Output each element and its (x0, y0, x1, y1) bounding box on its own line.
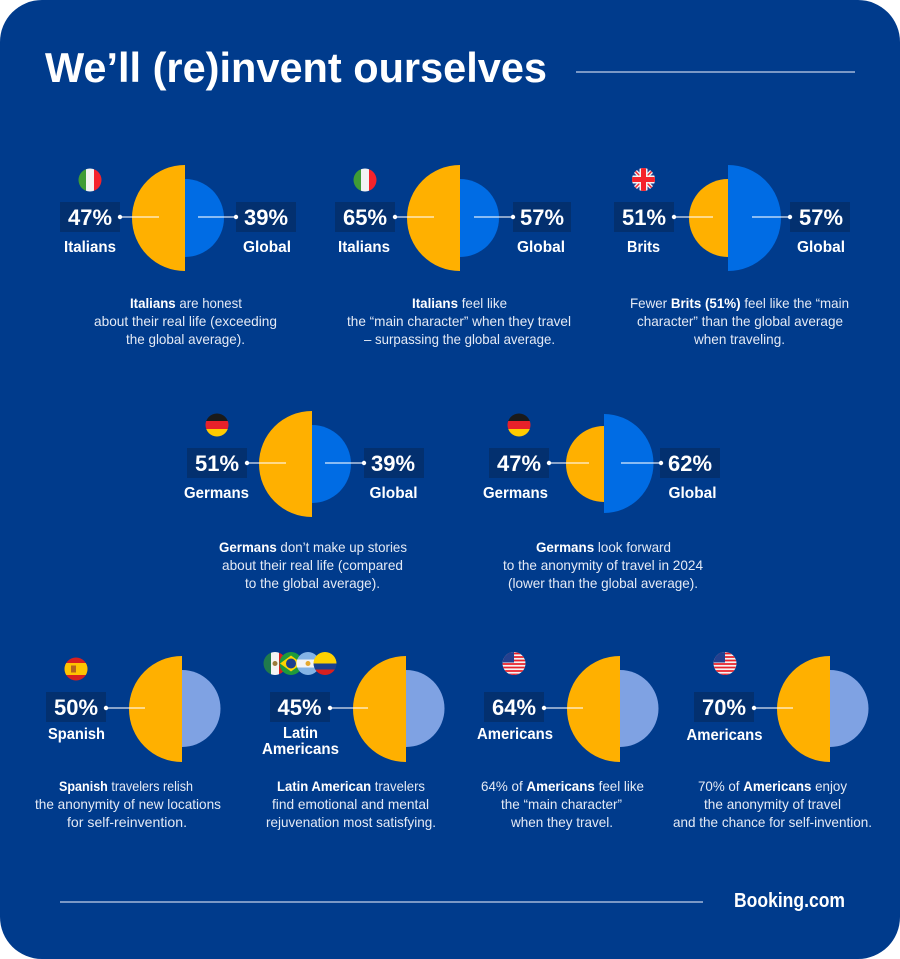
description: Germans don’t make up stories (219, 539, 407, 555)
half circle chart (689, 165, 781, 271)
value: Global 57%: 57% (520, 205, 564, 230)
description: Italians feel like (412, 295, 507, 311)
label: Latin Americans (262, 725, 339, 758)
value: Germans 47% (489, 448, 589, 478)
label: Germans: Germans (483, 485, 548, 502)
value: Spanish 50%: 50% (54, 695, 98, 720)
value: Americans 64%: 64% (492, 695, 536, 720)
description: when traveling. (693, 331, 785, 347)
description: for self-reinvention. (67, 814, 187, 830)
value: Latin Americans 45% (270, 692, 368, 722)
description: 64% of Americans feel like (481, 778, 644, 794)
label: Germans: Germans (184, 485, 249, 502)
label: Global: Global (370, 485, 418, 502)
description: Spanish travelers relish (59, 778, 193, 794)
panel: Italians main character (335, 165, 571, 347)
value: Americans 70%: 70% (702, 695, 746, 720)
half circle chart (407, 165, 499, 271)
label: Global: Global (797, 239, 845, 256)
icon: Brazil flag (280, 652, 300, 675)
value: Spanish 50% (46, 692, 145, 722)
icon: Mexico flag (264, 652, 283, 675)
value: Brits 51% (614, 202, 713, 232)
half circle chart (132, 165, 224, 271)
half circle chart (259, 411, 351, 517)
value: Latin Americans 45%: 45% (278, 695, 322, 720)
half circle chart (129, 656, 220, 762)
description: Fewer Brits (51%) feel like the “main (630, 295, 849, 311)
icon: Argentina flag (296, 652, 316, 675)
icon: Germany flag (205, 413, 229, 437)
label: Latin Americans: Americans (262, 741, 339, 758)
label: Global: Global (243, 239, 291, 256)
value: Italians 65% (335, 202, 434, 232)
description (673, 778, 872, 830)
description: to the anonymity of travel in 2024 (503, 557, 703, 573)
description: and the chance for self-invention. (673, 814, 872, 830)
value: Global 57% (752, 202, 850, 232)
panel: Germans stories (184, 411, 424, 591)
value: Global 62% (621, 448, 720, 478)
label: Americans: Americans (686, 727, 763, 744)
value: Global 57% (474, 202, 571, 232)
value: Germans 51%: 51% (195, 451, 239, 476)
value: Germans 47%: 47% (497, 451, 541, 476)
icon: Germany flag (507, 413, 531, 437)
description: find emotional and mental (272, 796, 429, 812)
description: character” than the global average (637, 313, 843, 329)
description: about their real life (exceeding (94, 313, 277, 329)
icon: US flag (502, 652, 526, 676)
description: Latin American travelers (277, 778, 425, 794)
description (219, 539, 407, 591)
description: 70% of Americans enjoy (698, 778, 847, 794)
label: Latin Americans: Latin (283, 725, 318, 742)
label: Americans: Americans (477, 726, 553, 743)
icon: Italy flag (353, 168, 377, 192)
title: We’ll (re)invent ourselves (45, 44, 547, 91)
panel: Germans anonymity (483, 413, 720, 591)
label: Italians: Italians (338, 239, 390, 256)
description (35, 778, 221, 830)
value: Americans 64% (484, 692, 583, 722)
icon: Colombia flag (313, 652, 337, 676)
value: Global 39% (325, 448, 424, 478)
icon: UK flag (632, 168, 656, 192)
panel: Americans main character (477, 652, 658, 830)
value: Global 62%: 62% (668, 451, 712, 476)
description: – surpassing the global average. (364, 331, 555, 347)
value: Global 39%: 39% (244, 205, 288, 230)
description: the “main character” when they travel (347, 313, 571, 329)
value: Global 39%: 39% (371, 451, 415, 476)
half circle chart (353, 656, 445, 762)
panel: Latin Americans (262, 652, 445, 830)
description (347, 295, 571, 347)
icon: US flag (713, 652, 737, 676)
description (481, 778, 644, 830)
value: Germans 51% (187, 448, 286, 478)
label: Global: Global (668, 485, 716, 502)
description: Italians are honest (130, 295, 242, 311)
description (630, 295, 849, 347)
value: Global 39% (198, 202, 296, 232)
icon: Spain flag (64, 657, 88, 681)
value: Italians 47%: 47% (68, 205, 112, 230)
description: (lower than the global average). (508, 575, 698, 591)
description: the anonymity of travel (704, 796, 841, 812)
half circle chart (567, 656, 658, 762)
label: Global: Global (517, 239, 565, 256)
panel: Brits main character (614, 165, 850, 347)
panel: Italians honest (60, 165, 296, 347)
label: Brits: Brits (627, 239, 660, 256)
description (94, 295, 277, 347)
description (503, 539, 703, 591)
value: Americans 70% (694, 692, 793, 722)
description: the anonymity of new locations (35, 796, 221, 812)
value: Italians 47% (60, 202, 159, 232)
label: Spanish: Spanish (48, 726, 105, 743)
value: Brits 51%: 51% (622, 205, 666, 230)
value: Global 57%: 57% (799, 205, 843, 230)
description: Germans look forward (536, 539, 671, 555)
description: when they travel. (510, 814, 613, 830)
description (266, 778, 436, 830)
icon: Italy flag (78, 168, 102, 192)
description: the “main character” (501, 796, 622, 812)
value: Italians 65%: 65% (343, 205, 387, 230)
half circle chart (777, 656, 868, 762)
description: to the global average). (245, 575, 380, 591)
logo: Booking.com: Booking.com (734, 890, 845, 912)
description: rejuvenation most satisfying. (266, 814, 436, 830)
panel: Americans anonymity (673, 652, 872, 830)
description: about their real life (compared (222, 557, 403, 573)
description: the global average). (126, 331, 245, 347)
half circle chart (566, 414, 654, 513)
panel: Spanish (35, 656, 221, 830)
label: Italians: Italians (64, 239, 116, 256)
